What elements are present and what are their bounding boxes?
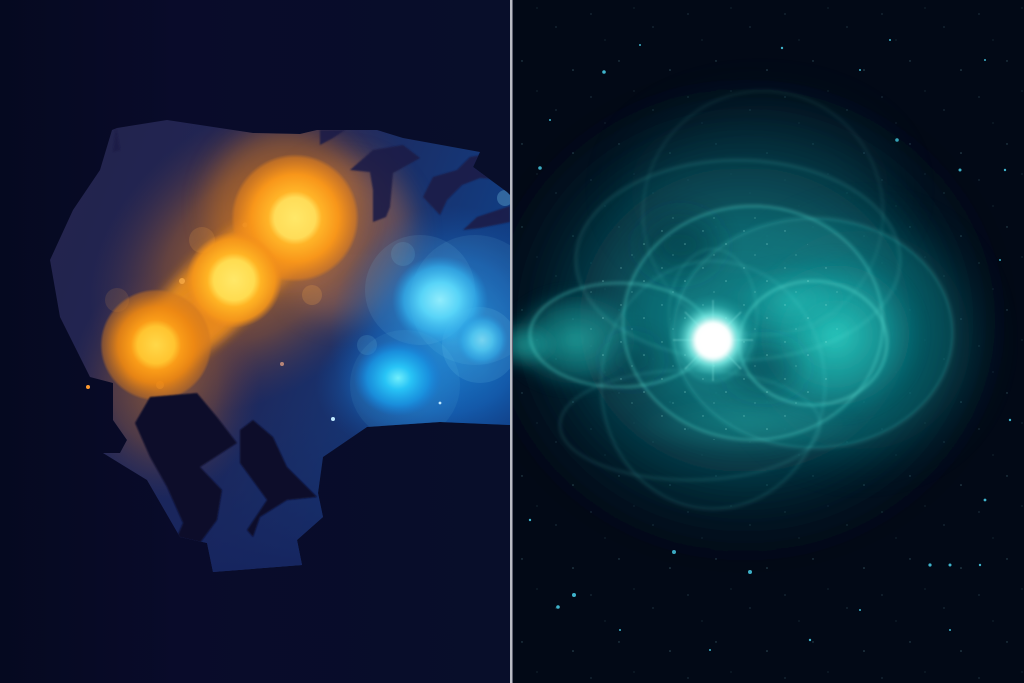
blue bubbles: [350, 190, 510, 426]
divider: [510, 0, 512, 683]
starfield: [513, 0, 1024, 683]
gulf landforms: [135, 393, 317, 543]
hotspot: lower blue: [356, 344, 436, 414]
orange haze: [84, 129, 427, 486]
map landmass: [50, 120, 510, 572]
panel: right background: [513, 0, 1024, 683]
nebula lobes: [623, 206, 952, 448]
ember on west coast: [86, 385, 90, 389]
central core: [695, 323, 731, 359]
orange small bubbles: [105, 222, 322, 389]
blue haze: [326, 220, 510, 432]
nebula dark pockets: [610, 217, 799, 390]
fine particles: [585, 210, 845, 440]
panel: left background: [0, 0, 510, 683]
nebula rings: [530, 91, 953, 509]
hotspot: upper blue: [394, 258, 484, 338]
northern lakes: [113, 128, 510, 230]
hotspot: upper orange: [231, 154, 359, 282]
nebula bright lobes: [513, 264, 915, 448]
hotspot: lower orange: [100, 289, 212, 401]
panel: glowing map: [50, 120, 510, 572]
star rays: [673, 300, 753, 381]
central star: [672, 299, 754, 381]
nebula haze: [517, 90, 1000, 554]
hotspot: middle orange: [186, 232, 282, 328]
sparks on map: [280, 362, 441, 421]
panel: teal nebula: [475, 0, 1024, 683]
hotspot: right blue: [462, 318, 506, 362]
